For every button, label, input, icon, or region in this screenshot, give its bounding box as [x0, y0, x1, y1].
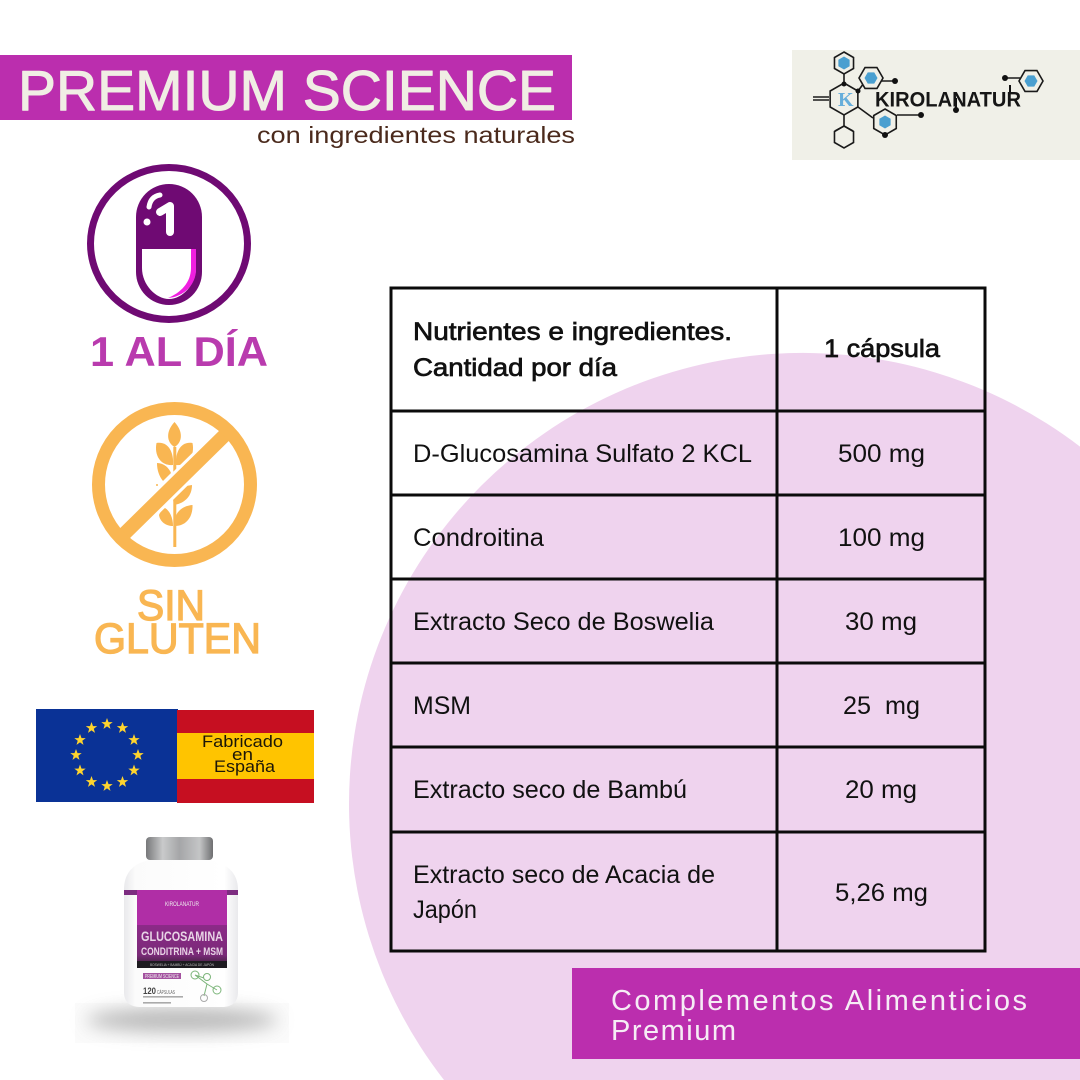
footer banner [572, 968, 1080, 1059]
product bottle: CONDITRINA + MSM [141, 946, 223, 958]
label: 1 al día: 1 AL DÍA [90, 328, 268, 375]
title banner: PREMIUM SCIENCE [18, 59, 556, 123]
logo: Kirolanatur: K [838, 89, 854, 111]
Spain flag: fabricado en España: Fabricado [202, 732, 283, 751]
table header: 1 cápsula [824, 335, 940, 363]
product bottle: CÁPSULAS [157, 989, 175, 996]
table header: Cantidad por día [413, 354, 617, 382]
table grid [391, 288, 985, 951]
table rows: Condroitina [413, 524, 544, 552]
footer banner: Complementos Alimenticios [611, 985, 1027, 1017]
product bottle: BOSWELIA + BAMBÚ + ACACIA DE JAPÓN [150, 962, 214, 967]
icon: one capsule [90, 168, 248, 320]
table rows: D-Glucosamina Sulfato 2 KCL [413, 440, 752, 468]
table rows: 25 mg [843, 692, 920, 720]
table rows: Extracto seco de Acacia de [413, 861, 715, 889]
Spain flag: fabricado en España: en [232, 745, 253, 764]
logo: Kirolanatur: KIROLANATUR [875, 88, 1021, 112]
icon: gluten free [98, 408, 250, 560]
table rows: 100 mg [838, 524, 925, 552]
footer banner: Premium [611, 1015, 736, 1047]
table header: Nutrientes e ingredientes. [413, 318, 732, 346]
product bottle: GLUCOSAMINA [141, 928, 223, 944]
table rows: 30 mg [845, 608, 917, 636]
nutrition table [391, 288, 985, 951]
Spain flag: fabricado en España [177, 710, 314, 803]
subtitle: con ingredientes naturales [257, 122, 575, 148]
label: sin gluten [94, 582, 261, 663]
label: sin gluten: GLUTEN [94, 615, 261, 663]
table rows [413, 440, 928, 924]
background circle [349, 353, 1080, 1080]
table rows: MSM [413, 692, 471, 720]
product bottle: KIROLANATUR [165, 902, 200, 908]
Spain flag: fabricado en España: España [214, 757, 276, 776]
table rows: 20 mg [845, 776, 917, 804]
product bottle: PREMIUM SCIENCE [145, 974, 179, 980]
product bottle: 120 [143, 986, 156, 996]
table header [413, 318, 940, 382]
table rows: 500 mg [838, 440, 925, 468]
table rows: Japón [413, 896, 477, 924]
table rows: 5,26 mg [835, 879, 928, 907]
table rows: Extracto seco de Bambú [413, 776, 687, 804]
EU flag [36, 709, 178, 802]
label: sin gluten: SIN [137, 582, 205, 630]
table rows: Extracto Seco de Boswelia [413, 608, 714, 636]
product bottle [75, 837, 289, 1043]
logo: Kirolanatur [792, 50, 1080, 160]
